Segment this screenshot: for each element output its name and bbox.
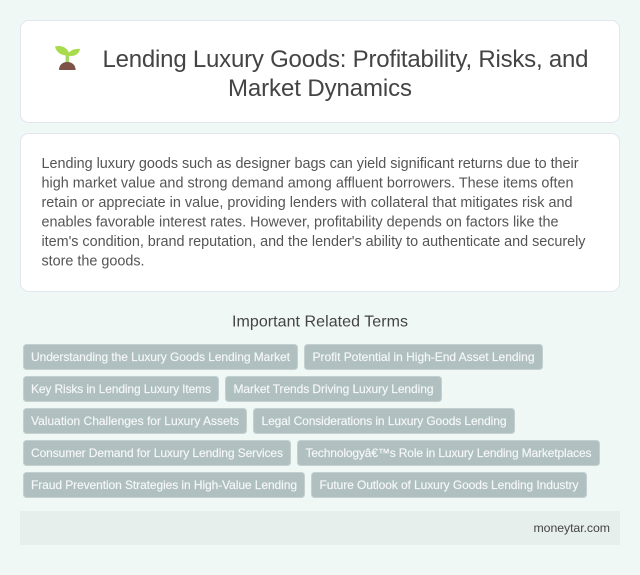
title: Market Dynamics: [228, 75, 412, 102]
tag: valuation challenges: [24, 408, 246, 434]
heading: important related terms: Important Related Terms: [232, 314, 408, 330]
tag: future outlook: Future Outlook of Luxury Goods Lending Industry: [320, 478, 578, 492]
tag: market trends: [226, 376, 442, 402]
panel: description: [20, 134, 620, 292]
tag: profit potential: [304, 344, 542, 370]
tag: profit potential: Profit Potential in High-End Asset Lending: [312, 350, 534, 364]
tag: legal considerations: [254, 408, 514, 434]
term tags: [24, 344, 600, 498]
description text: [42, 156, 586, 270]
tag: understanding the market: Understanding the Luxury Goods Lending Market: [31, 350, 291, 364]
tag: fraud prevention: Fraud Prevention Strategies in High-Value Lending: [31, 478, 297, 492]
tag: fraud prevention: [24, 472, 304, 498]
description text: Lending luxury goods such as designer bags can yield significant returns due to their: [42, 156, 579, 172]
description text: store the goods.: [42, 254, 144, 270]
tag: consumer demand: [24, 440, 290, 466]
tag: consumer demand: Consumer Demand for Luxury Lending Services: [31, 446, 283, 460]
footer source label: moneytar.com: [534, 521, 610, 535]
tag: technology role: Technologyâ€™s Role in Luxury Lending Marketplaces: [306, 446, 592, 460]
description text: enables favorable interest rates. However, profitability depends on factors like the: [42, 214, 558, 230]
tag: key risks: [24, 376, 218, 402]
description text: retain or appreciate in value, providing lenders with collateral that mitigates risk and: [42, 195, 572, 211]
description text: high market value and strong demand among affluent borrowers. These items often: [42, 176, 574, 192]
description text: item's condition, brand reputation, and the lender's ability to authenticate and securely: [42, 234, 586, 250]
tag: legal considerations: Legal Considerations in Luxury Goods Lending: [262, 414, 506, 428]
title: Lending Luxury Goods: Profitability, Risks, and: [102, 46, 588, 73]
tag: key risks: Key Risks in Lending Luxury Items: [31, 382, 211, 396]
tag: technology role: [298, 440, 600, 466]
tag: future outlook: [312, 472, 586, 498]
tag: market trends: Market Trends Driving Luxury Lending: [234, 382, 434, 396]
icon: sprout: [55, 46, 80, 70]
panel: header: [20, 20, 620, 122]
title: [102, 46, 588, 102]
tag: understanding the market: [24, 344, 298, 370]
footer: [20, 511, 620, 545]
tag: valuation challenges: Valuation Challenges for Luxury Assets: [31, 414, 239, 428]
